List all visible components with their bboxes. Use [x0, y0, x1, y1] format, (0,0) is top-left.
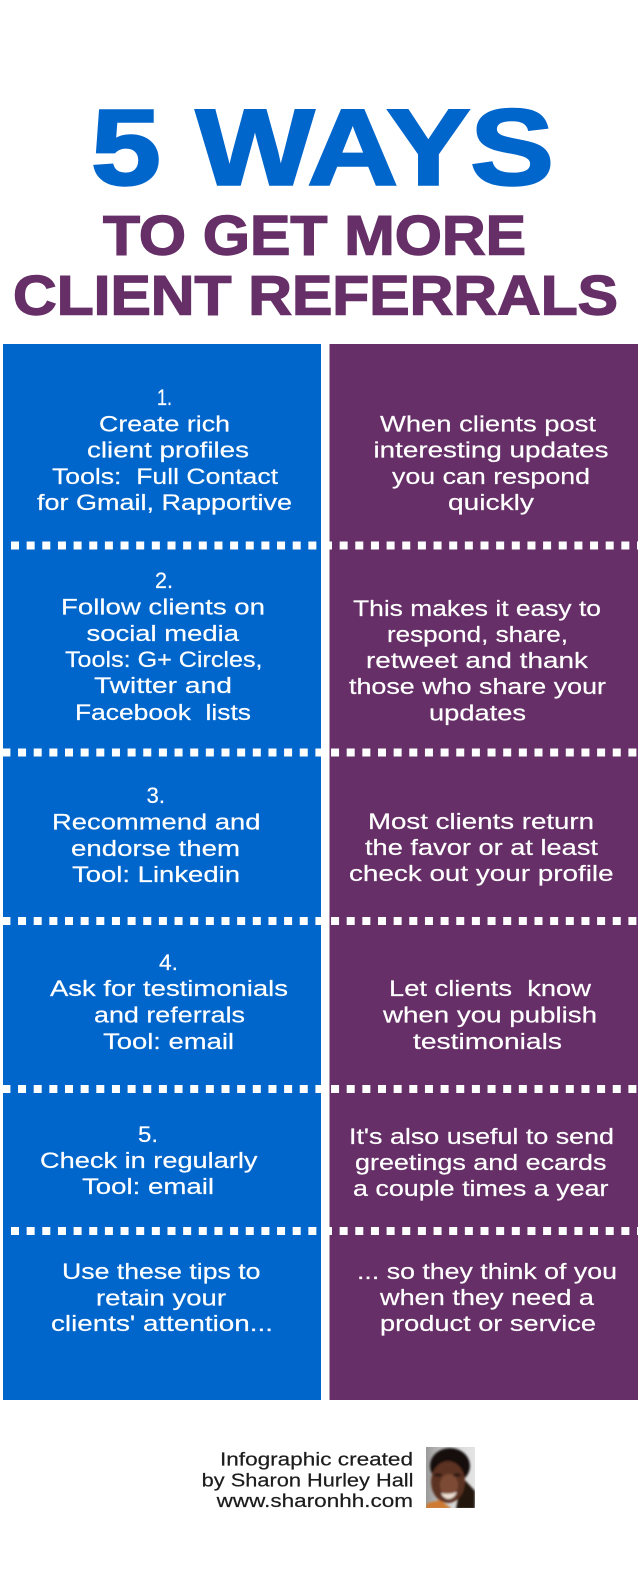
row dividers	[2, 546, 638, 1231]
tip 4 text: Ask for testimonials	[50, 976, 288, 1001]
title	[13, 86, 618, 326]
footer credit	[202, 1450, 414, 1511]
tip 1 text: Create rich	[99, 412, 230, 437]
title line: 5 WAYS: 5 WAYS	[91, 86, 554, 208]
tip 3 benefit text: the favor or at least	[365, 835, 599, 860]
footer credit: by Sharon Hurley Hall	[202, 1471, 414, 1491]
tip 4 text: Tool: email	[103, 1029, 234, 1054]
closing text left: retain your	[96, 1286, 227, 1310]
closing text left: Use these tips to	[62, 1259, 260, 1284]
closing text right	[357, 1259, 617, 1336]
tip 5 benefit text: greetings and ecards	[355, 1150, 606, 1175]
tip 5 benefit text	[349, 1124, 614, 1201]
tip 1 benefit text	[374, 412, 608, 515]
tip 1 benefit text: quickly	[448, 490, 535, 515]
icon: author portrait	[426, 1447, 475, 1508]
tip 1 text: Tools: Full Contact	[52, 464, 279, 489]
tip 3 benefit text: check out your profile	[349, 861, 614, 886]
footer credit: www.sharonhh.com	[215, 1491, 413, 1511]
tip 3 text	[52, 783, 260, 887]
closing text left	[51, 1259, 273, 1336]
tip 2 text: Facebook lists	[75, 700, 251, 725]
tip 1 text: for Gmail, Rapportive	[37, 490, 292, 515]
closing text right: product or service	[380, 1311, 596, 1336]
tip 4 benefit text: Let clients know	[389, 976, 592, 1001]
tip 3 text: Tool: Linkedin	[72, 862, 240, 887]
tip 3 benefit text	[349, 809, 614, 886]
tip 2 text: 2.	[155, 568, 173, 593]
tip 5 text: 5.	[138, 1122, 158, 1147]
tip 2 benefit text: retweet and thank	[366, 648, 589, 673]
panel: purple column background	[330, 344, 638, 1400]
tip 4 benefit text: testimonials	[413, 1029, 562, 1054]
tip 3 text: endorse them	[71, 836, 240, 861]
tip 2 benefit text	[349, 596, 607, 726]
tip 5 benefit text: It's also useful to send	[349, 1124, 614, 1149]
tip 4 benefit text: when you publish	[382, 1002, 597, 1028]
tip 2 text: social media	[86, 621, 240, 646]
tip 1 text	[37, 385, 292, 515]
tip 2 text: Follow clients on	[61, 595, 265, 620]
tip 2 benefit text: those who share your	[349, 674, 607, 699]
closing text left: clients' attention...	[51, 1311, 273, 1336]
tip 3 text: Recommend and	[52, 810, 260, 834]
tip 5 text: Tool: email	[82, 1174, 214, 1199]
closing text right: ... so they think of you	[357, 1259, 617, 1284]
tip 1 benefit text: When clients post	[380, 412, 597, 436]
tip 5 text	[40, 1122, 258, 1199]
tip 2 text	[61, 568, 265, 725]
tip 2 benefit text: updates	[429, 701, 526, 726]
closing text right: when they need a	[379, 1285, 595, 1310]
tip 2 benefit text: respond, share,	[387, 622, 568, 647]
tip 4 text: and referrals	[94, 1002, 245, 1028]
tip 3 text: 3.	[146, 783, 165, 808]
tip 3 benefit text: Most clients return	[368, 809, 594, 834]
title line: to get more: TO GET MORE	[103, 204, 526, 266]
tip 1 text: client profiles	[87, 438, 249, 463]
tip 4 text: 4.	[159, 950, 178, 975]
tip 4 text	[50, 950, 288, 1054]
tip 5 benefit text: a couple times a year	[353, 1176, 609, 1201]
title line: client referrals: CLIENT REFERRALS	[13, 264, 618, 326]
panel: blue column background	[3, 344, 321, 1400]
tip 2 text: Tools: G+ Circles,	[65, 647, 262, 672]
tip 4 benefit text	[382, 976, 597, 1054]
tip 1 text: 1.	[157, 385, 172, 410]
tip 1 benefit text: you can respond	[392, 464, 590, 489]
tip 2 benefit text: This makes it easy to	[353, 596, 601, 621]
footer credit: Infographic created	[220, 1450, 413, 1470]
tip 1 benefit text: interesting updates	[374, 438, 608, 463]
tip 2 text: Twitter and	[94, 673, 232, 698]
tip 5 text: Check in regularly	[40, 1148, 258, 1173]
